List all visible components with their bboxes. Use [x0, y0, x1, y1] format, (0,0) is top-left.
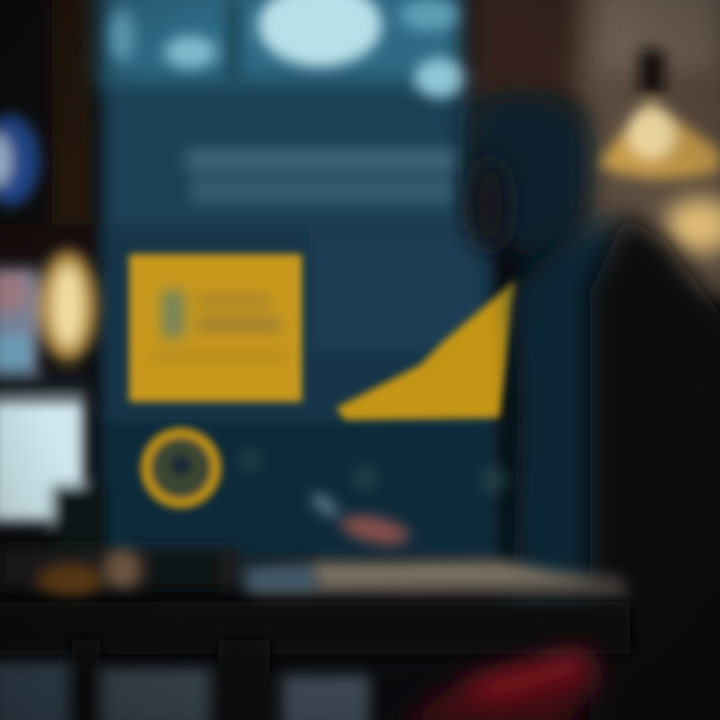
panel: teal window board: [100, 70, 500, 560]
panel: dark table edge: [0, 602, 630, 654]
chart: yellow rising triangle: [336, 280, 516, 420]
heading: blurred title on board: [185, 148, 460, 204]
black coat: [590, 215, 720, 720]
icon: hand and pen: [308, 489, 412, 550]
hood: [470, 97, 590, 260]
icon: second lamp: [666, 197, 720, 253]
text block: blurred card content: [150, 290, 285, 362]
panel: yellow card: [129, 254, 302, 402]
panel: left screens and lights: [0, 114, 102, 565]
panel: table with papers: [0, 548, 630, 600]
panel: upper right brown and cream wall: [470, 0, 720, 300]
panel: bottom windows and chair legs: [0, 640, 370, 720]
icon: bright window patches: [109, 0, 466, 98]
face: [470, 157, 510, 253]
icon: hanging lamp: [595, 50, 720, 179]
icon: red garment: [400, 645, 605, 720]
icon: faint board marks: [240, 450, 509, 494]
shoulder navy: [512, 215, 620, 720]
panel: top bright window: [100, 0, 465, 85]
panel: person silhouette: [470, 97, 720, 720]
panel: left wall: [0, 0, 105, 265]
icon: yellow circle: [146, 433, 216, 503]
